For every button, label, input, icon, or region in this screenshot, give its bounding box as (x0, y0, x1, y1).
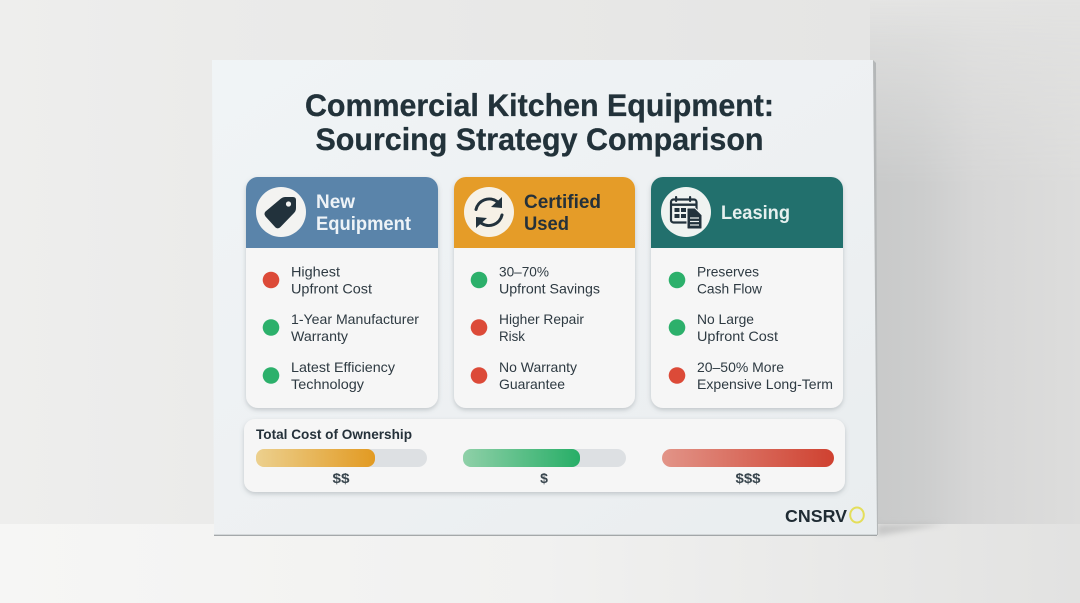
bar: leasing cost: $$$ (736, 470, 761, 486)
list: leasing (669, 264, 833, 392)
list: new equipment (263, 264, 419, 392)
header: leasing (651, 177, 843, 248)
title: Sourcing Strategy Comparison (316, 121, 764, 157)
list: new equipment: 1-Year Manufacturer (291, 311, 419, 327)
title: Commercial Kitchen Equipment: (305, 87, 774, 123)
board side edge (873, 60, 878, 535)
list: certified used: Higher Repair (499, 311, 584, 327)
panel: leasing (651, 177, 843, 408)
heading: new equipment: New (316, 192, 355, 213)
bar: new equipment cost (256, 449, 427, 486)
list: new equipment: Latest Efficiency (291, 359, 395, 375)
icon: calendar and document (661, 187, 711, 237)
icon: refresh arrows (464, 187, 514, 237)
list: certified used: No Warranty (499, 359, 577, 375)
floor (0, 524, 1080, 603)
list: new equipment: Highest (291, 264, 340, 280)
heading: certified used: Certified (524, 192, 601, 213)
panel: new equipment (246, 177, 438, 408)
header: new equipment (246, 177, 438, 248)
list: certified used: Guarantee (499, 376, 565, 392)
list: new equipment: Technology (291, 376, 364, 392)
list: leasing: Preserves (697, 264, 759, 280)
title (305, 87, 774, 157)
bar: new equipment cost: $$ (332, 470, 350, 486)
list: new equipment: Upfront Cost (291, 280, 372, 296)
panel: total cost of ownership (244, 419, 845, 492)
list: leasing: Cash Flow (697, 280, 763, 296)
heading: total cost of ownership: Total Cost of Ownership (256, 426, 412, 442)
heading: new equipment (316, 192, 412, 235)
panel: certified used (454, 177, 635, 408)
list: certified used: Risk (499, 328, 526, 344)
list: leasing: No Large (697, 311, 754, 327)
list: certified used: 30–70% (499, 264, 549, 280)
board shadow on wall (870, 35, 1053, 524)
heading: new equipment: Equipment (316, 214, 412, 235)
list: leasing: Upfront Cost (697, 328, 778, 344)
logo: CNSRV: CNSRV (785, 506, 847, 526)
heading: leasing: Leasing (721, 203, 790, 224)
poster board (212, 60, 877, 535)
list: certified used (471, 264, 600, 392)
list: new equipment: Warranty (291, 328, 348, 344)
list: leasing: Expensive Long-Term (697, 376, 833, 392)
list: certified used: Upfront Savings (499, 280, 600, 296)
floor shadow (877, 524, 945, 536)
heading: certified used (524, 192, 601, 235)
bar: leasing cost (662, 449, 834, 486)
list: leasing: 20–50% More (697, 359, 784, 375)
icon: price tag (256, 187, 306, 237)
heading: certified used: Used (524, 214, 569, 235)
bar: certified used cost (463, 449, 626, 486)
bar: certified used cost: $ (540, 470, 548, 486)
header: certified used (454, 177, 635, 248)
